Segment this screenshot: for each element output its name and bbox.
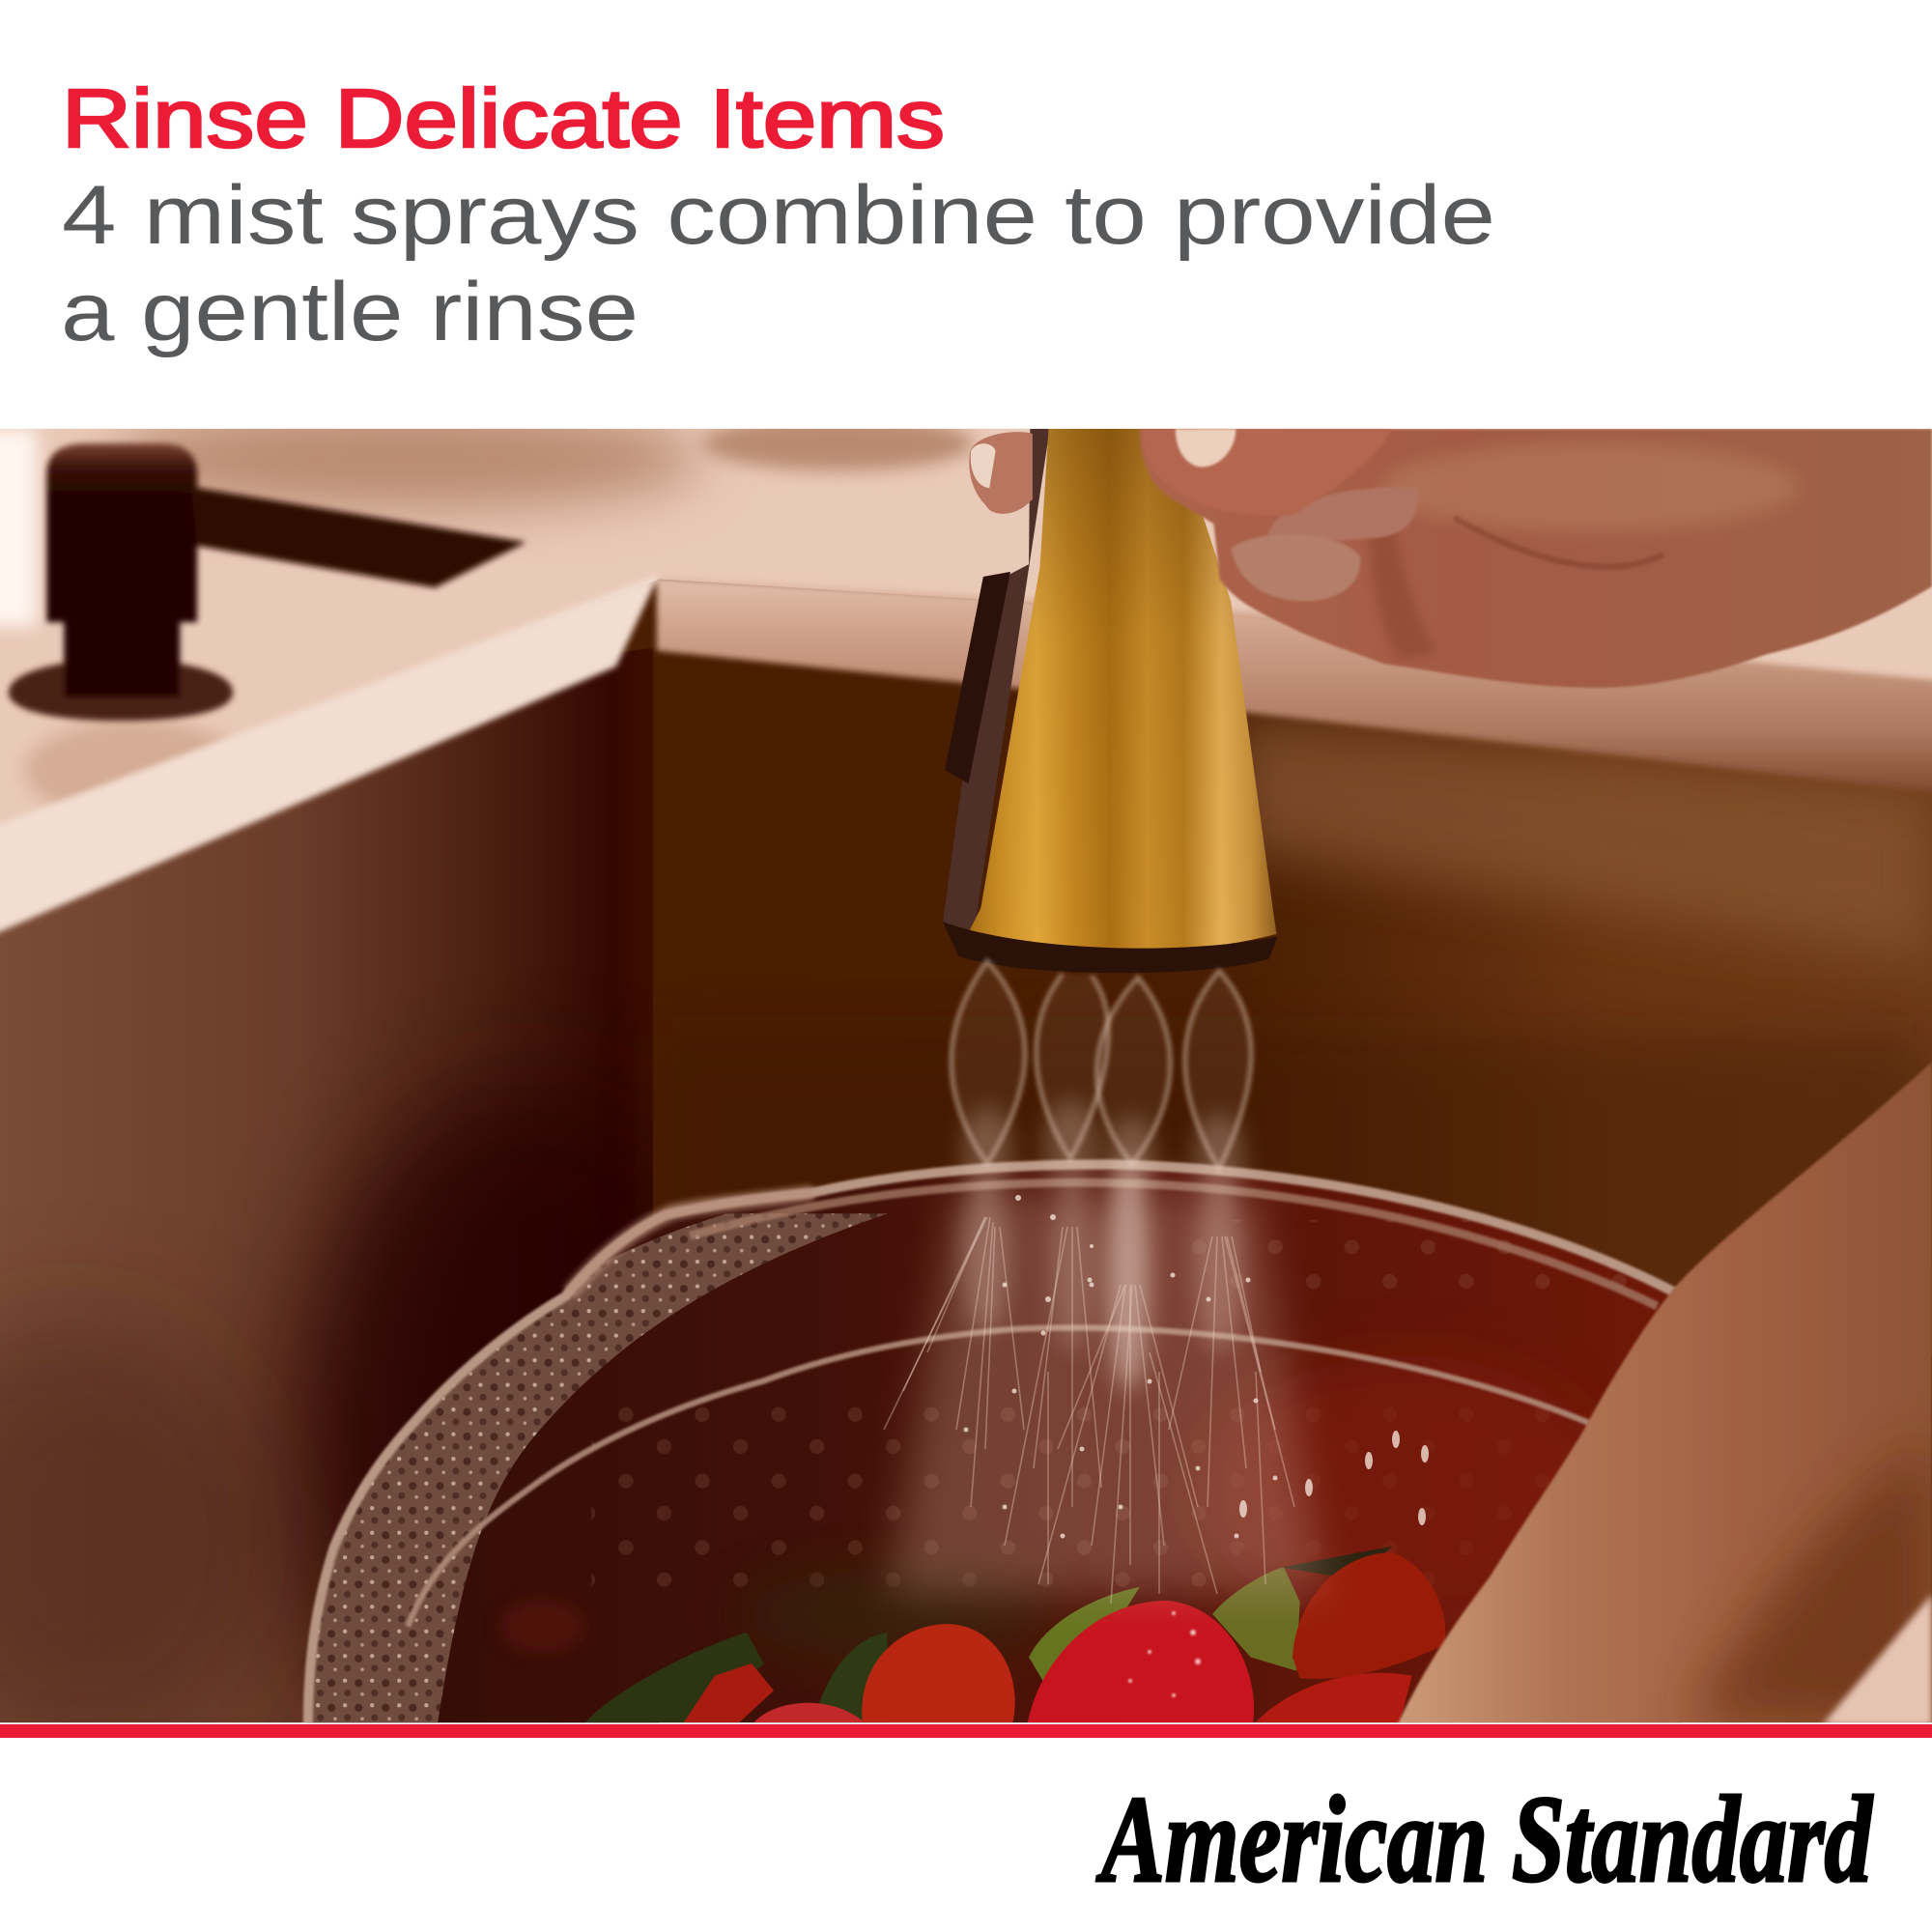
photo: sprayer rinsing strawberries in a sink (0, 407, 1932, 1824)
hand holding the sprayer (969, 429, 1932, 688)
red divider bar (0, 1724, 1932, 1738)
mist: lower fanning spray (884, 1159, 1429, 1697)
heading: Rinse Delicate Items: Rinse Delicate Items (62, 73, 945, 165)
sprayer head: dark back and brushed gold body (943, 429, 1278, 973)
subheading text: a gentle rinse (61, 266, 639, 358)
counter front lip (0, 574, 1932, 948)
icon: soap dispenser (9, 443, 526, 721)
forearm in the foreground (1397, 1062, 1932, 1725)
strawberries and leaves (500, 1547, 1445, 1722)
counter top (0, 407, 1932, 838)
sink left wall (0, 647, 659, 1723)
colander bowl (308, 1164, 1682, 1725)
subheading text (61, 169, 1495, 358)
subheading text: 4 mist sprays combine to provide (62, 169, 1495, 262)
sink back wall (653, 647, 1932, 1355)
mist: four spindle-shaped spray streams (952, 961, 1251, 1195)
